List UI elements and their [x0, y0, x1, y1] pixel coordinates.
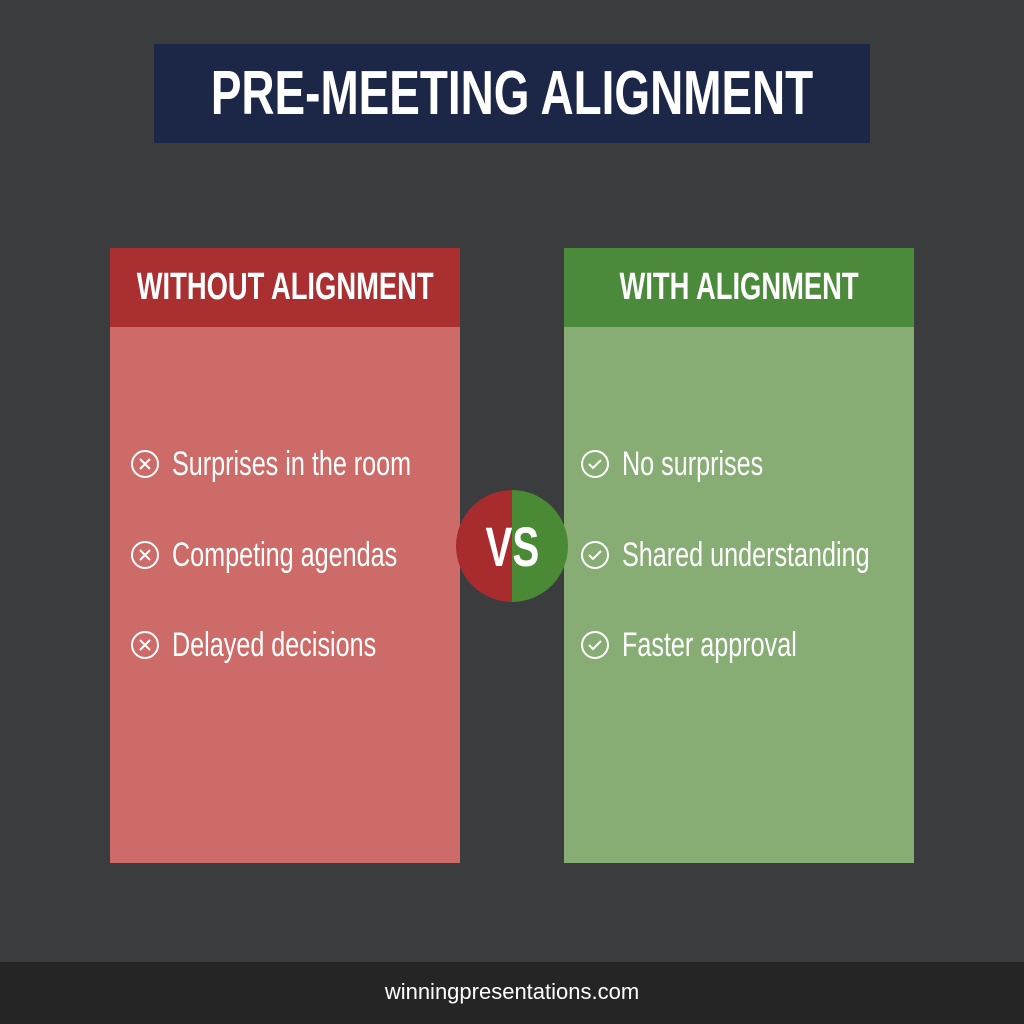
item: surprises: Surprises in the room: [172, 444, 411, 482]
heading: without alignment: WITHOUT ALIGNMENT: [137, 266, 433, 308]
panel: without alignment: [110, 248, 460, 863]
item: delayed decisions: Delayed decisions: [172, 626, 376, 664]
panel: with alignment: [564, 248, 914, 863]
heading: with alignment: WITH ALIGNMENT: [619, 266, 859, 308]
title: PRE-MEETING ALIGNMENT: [211, 59, 813, 128]
heading: without alignment: [110, 248, 460, 327]
VS badge: [456, 490, 568, 602]
VS badge: VS: [485, 514, 539, 578]
title: [154, 44, 870, 143]
item: no surprises: No surprises: [622, 444, 763, 482]
item: shared understanding: Shared understanding: [622, 536, 870, 574]
footer: [0, 962, 1024, 1024]
footer: winningpresentations.com: [385, 979, 639, 1004]
item: competing agendas: Competing agendas: [172, 536, 397, 574]
item: faster approval: Faster approval: [622, 626, 797, 664]
heading: with alignment: [564, 248, 914, 327]
